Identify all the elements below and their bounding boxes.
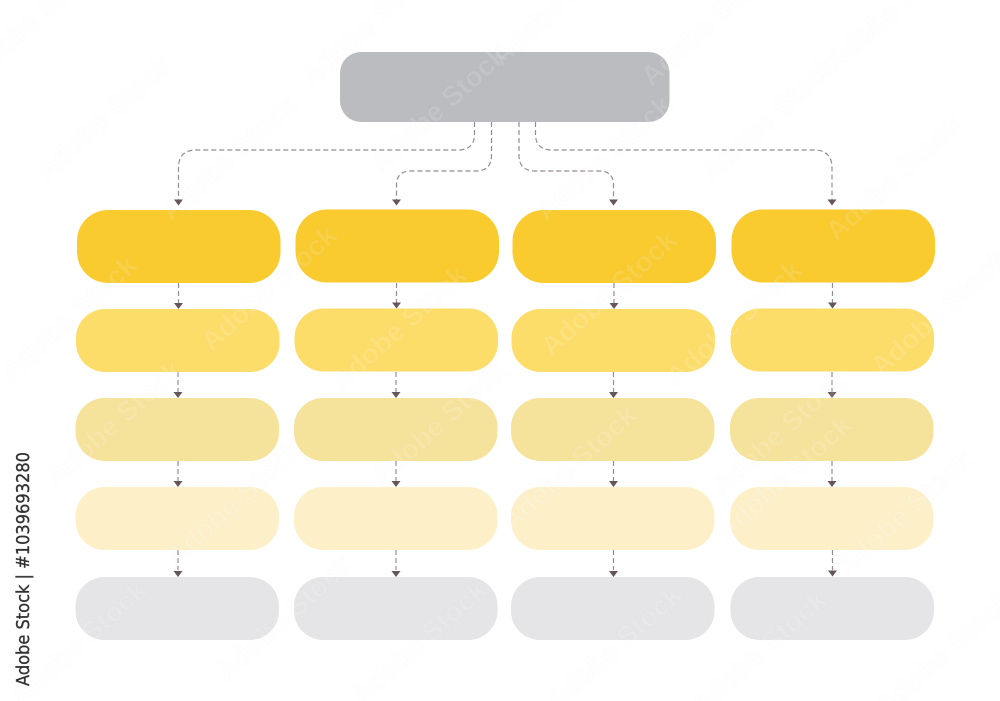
column 1 [76,210,280,640]
stock watermarks: Adobe Stock [40,354,188,492]
stock id caption: Adobe Stock | #1039693280 [14,452,34,686]
connectors from root to column heads [178,122,832,200]
stock watermarks: Adobe Stock [710,409,858,547]
column 2 [294,210,499,640]
stock watermarks: Adobe Stock [160,434,308,572]
arrowheads between rows [174,302,837,577]
stock watermarks: Adobe Stock [830,444,978,582]
arrowheads into column heads [174,200,836,206]
stock watermarks: Adobe Stock [30,49,178,187]
dashed connectors between rows [178,283,832,570]
stock watermarks: Adobe Stock [325,259,473,397]
stock watermarks: Adobe Stock [210,549,358,687]
stock watermarks: Adobe Stock [660,254,808,392]
column 3 [511,210,716,640]
stock watermarks: Adobe Stock [820,109,968,247]
stock watermarks: Adobe Stock [495,399,643,537]
stock watermarks: Adobe Stock [530,89,678,227]
column 4 [730,210,935,640]
stock watermarks: Adobe Stock [195,219,343,357]
stock watermarks: Adobe Stock [695,49,843,187]
stock watermarks: Adobe Stock [705,364,853,502]
stock watermarks: Adobe Stock [535,224,683,362]
stock watermarks: Adobe Stock [365,39,513,177]
stock watermarks: Adobe Stock [365,354,513,492]
stock watermarks: Adobe Stock [155,89,303,227]
root box [340,52,670,122]
